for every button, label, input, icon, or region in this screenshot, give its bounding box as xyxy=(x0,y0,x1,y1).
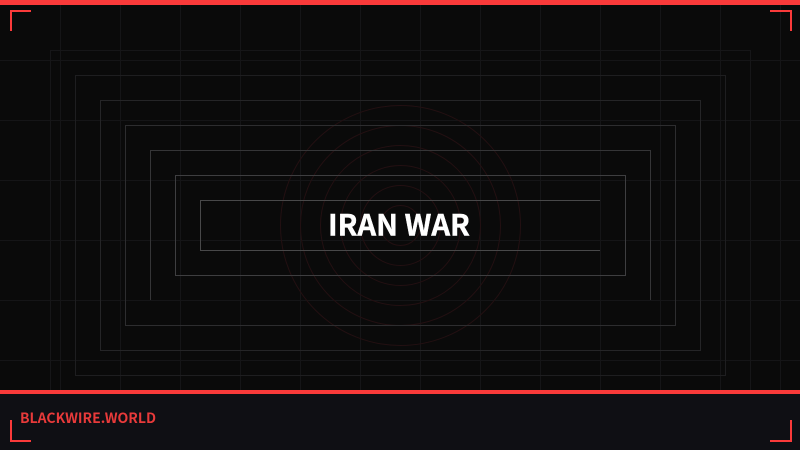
nested rectangular frames xyxy=(50,50,750,390)
corner bracket: top left xyxy=(11,11,31,31)
concentric radar circles xyxy=(280,106,520,346)
corner bracket: top right xyxy=(770,11,791,31)
footer brand label: BLACKWIRE.WORLD xyxy=(20,408,156,428)
top accent bar xyxy=(0,0,800,5)
corner bracket: bottom right xyxy=(770,420,791,441)
footer band xyxy=(0,390,800,450)
corner bracket: bottom left xyxy=(11,420,31,441)
title: IRAN WAR xyxy=(328,202,470,244)
